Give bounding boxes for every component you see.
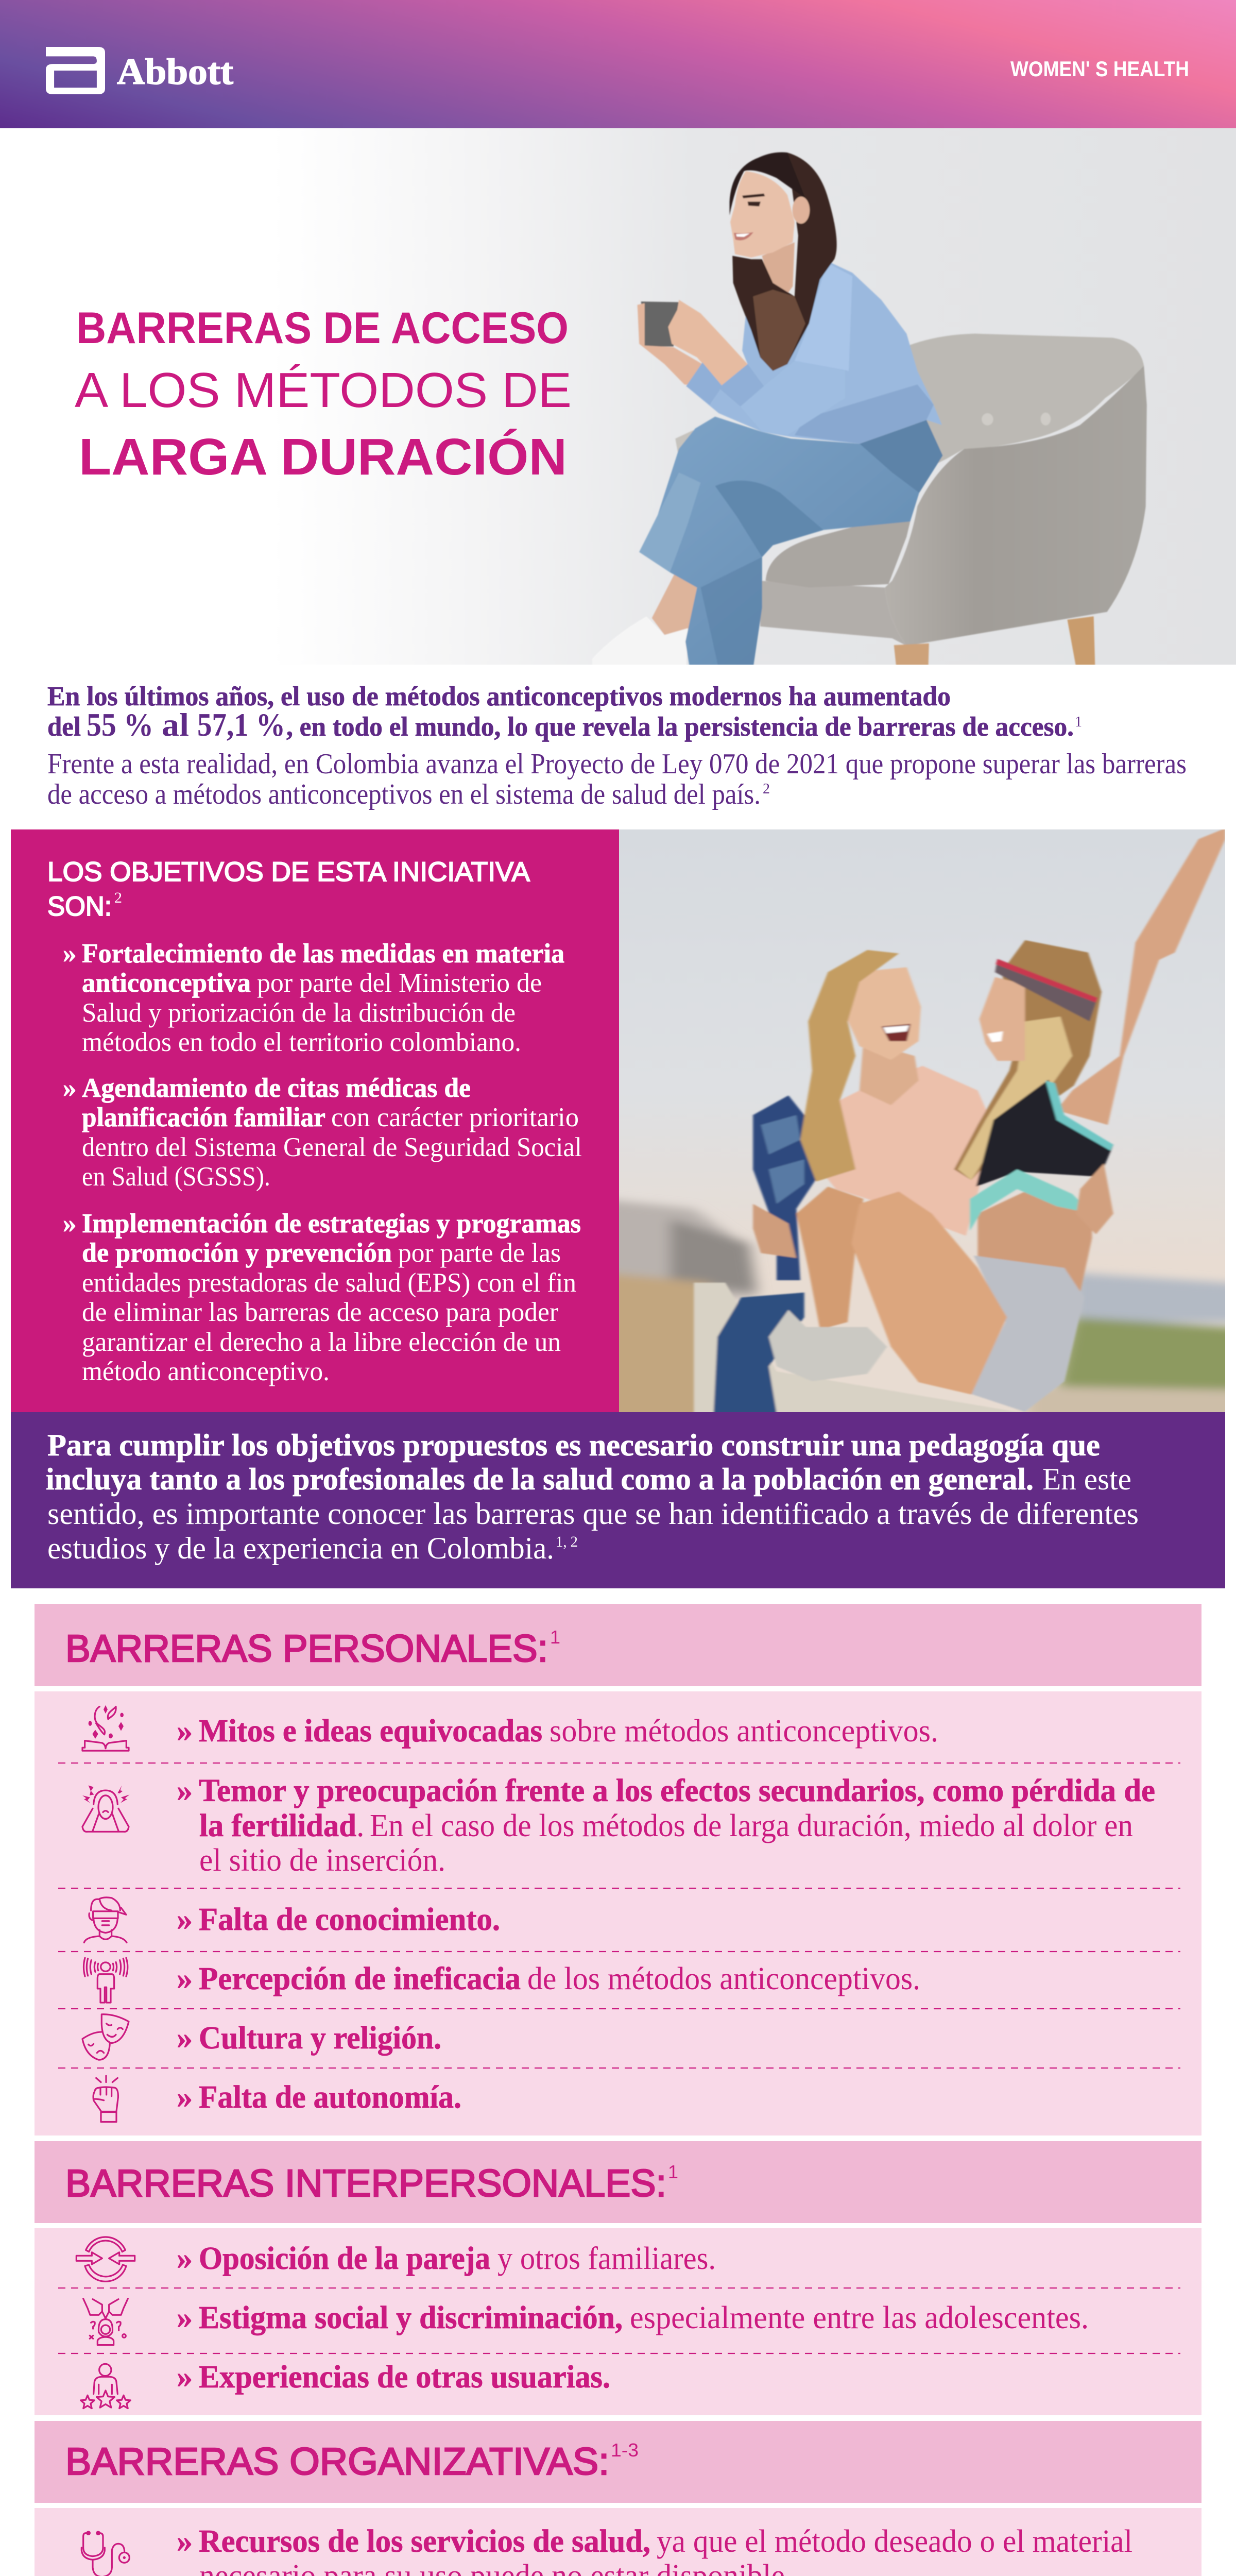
row: oposicion: Oposición de la pareja xyxy=(199,2241,490,2276)
left woman neck and face xyxy=(860,1041,919,1105)
ledge xyxy=(694,1283,1025,1413)
hair xyxy=(730,152,837,371)
legging lower xyxy=(714,1293,804,1413)
icon: worried woman xyxy=(82,1785,130,1832)
shorts xyxy=(970,1256,1084,1412)
panel: barreras interpersonales xyxy=(35,2141,1201,2415)
row: temor: . xyxy=(356,1808,365,1843)
objective 1: por parte del Ministerio de xyxy=(257,968,542,998)
intro text: al xyxy=(162,706,189,743)
intro text: 55 % xyxy=(87,706,153,743)
row: temor: el sitio de inserción. xyxy=(199,1843,445,1878)
title: BARRERAS DE ACCESO xyxy=(76,303,569,353)
legging upper xyxy=(753,1095,816,1280)
row: mitos: Mitos e ideas equivocadas xyxy=(199,1714,542,1749)
objective 1: » xyxy=(63,939,76,969)
icon: pointing hands at woman xyxy=(83,2299,128,2345)
intro text xyxy=(47,682,1187,810)
neck xyxy=(761,242,795,293)
row: oposicion xyxy=(177,2241,716,2276)
right woman face xyxy=(980,977,1025,1061)
objective 3: garantizar el derecho a la libre elección de un xyxy=(82,1327,561,1357)
panel: barreras organizativas xyxy=(35,2421,1201,2576)
row: temor: la fertilidad xyxy=(199,1808,356,1843)
intro text: , en todo el mundo, lo que revela la persistencia de barreras de acceso. xyxy=(286,712,1074,742)
row: estigma: » xyxy=(177,2300,193,2335)
panel: objectives xyxy=(11,829,619,1412)
background landscape xyxy=(552,1194,1236,1445)
objectives heading: LOS OBJETIVOS DE ESTA INICIATIVA xyxy=(47,857,530,887)
Abbott logo white xyxy=(46,47,233,94)
panel: pedagogy callout xyxy=(11,1412,1225,1588)
icon: raised fist xyxy=(93,2076,118,2122)
objective 2: dentro del Sistema General de Seguridad Social xyxy=(82,1132,582,1162)
belly xyxy=(977,1192,1092,1293)
icon: stethoscope xyxy=(81,2531,129,2576)
icon: opposing arrows xyxy=(76,2237,135,2281)
row: mitos xyxy=(177,1714,938,1749)
Abbott logo white: Abbott xyxy=(117,51,233,92)
hand on waist xyxy=(1076,1163,1113,1234)
header band xyxy=(0,0,1236,128)
section header: BARRERAS PERSONALES: xyxy=(65,1627,548,1670)
hero photo: woman in armchair xyxy=(421,128,1236,665)
row: recursos xyxy=(177,2524,1132,2576)
intro text: 2 xyxy=(763,781,770,797)
objective 2: en Salud (SGSSS). xyxy=(82,1162,270,1192)
intro text: 57,1 % xyxy=(197,706,285,743)
intro text: de acceso a métodos anticonceptivos en el sistema de salud del país. xyxy=(47,778,761,810)
row: ineficacia xyxy=(177,1961,920,1996)
section header xyxy=(35,2421,1201,2503)
section header: BARRERAS ORGANIZATIVAS: xyxy=(65,2440,609,2483)
objective 3: método anticonceptivo. xyxy=(82,1357,330,1386)
title xyxy=(75,303,572,486)
left woman arm xyxy=(753,1204,796,1258)
objective 3: Implementación de estrategias y programas xyxy=(82,1209,581,1239)
section header: 1-3 xyxy=(611,2439,639,2461)
panel: barreras personales xyxy=(35,1604,1201,2136)
objective 3: de promoción y prevención xyxy=(82,1238,392,1268)
panel: pedagogy callout: Para cumplir los objetivos propuestos es necesario construir una pedagogía que xyxy=(47,1428,1100,1462)
row: cultura: » xyxy=(177,2021,193,2056)
objective 2: con carácter prioritario xyxy=(331,1103,579,1132)
row: temor: En el caso de los métodos de larga duración, miedo al dolor en xyxy=(370,1808,1133,1843)
icon: magic book xyxy=(82,1705,129,1751)
row: ineficacia: » xyxy=(177,1961,193,1996)
objectives heading xyxy=(47,857,530,922)
jeans xyxy=(639,417,942,669)
icon: person with signal waves xyxy=(83,1958,128,2003)
header label: WOMEN' S HEALTH xyxy=(1010,57,1189,81)
row: recursos: » xyxy=(177,2524,193,2559)
headband xyxy=(995,959,1097,1022)
row: experiencias: » xyxy=(177,2360,193,2395)
row: estigma xyxy=(177,2300,1089,2335)
left woman top xyxy=(820,1066,995,1236)
panel: pedagogy callout: sentido, es importante conocer las barreras que se han identificado a través de diferentes xyxy=(47,1497,1139,1531)
intro text: En los últimos años, el uso de métodos anticonceptivos modernos ha aumentado xyxy=(47,682,951,711)
row: cultura: Cultura y religión. xyxy=(199,2021,441,2056)
panel: pedagogy callout: En este xyxy=(1042,1462,1131,1496)
icon: theatre masks xyxy=(82,2014,129,2060)
objective 3: por parte de las xyxy=(398,1238,561,1268)
objective 1: Salud y priorización de la distribución de xyxy=(82,998,516,1028)
row: ineficacia: Percepción de ineficacia xyxy=(199,1961,521,1996)
icon: person with stars xyxy=(81,2364,130,2409)
row: autonomia: » xyxy=(177,2080,193,2115)
row: conocimiento: » xyxy=(177,1902,193,1937)
objective 2 xyxy=(63,1073,582,1192)
back hand and forearm xyxy=(638,303,702,386)
sweater xyxy=(686,261,942,444)
section header xyxy=(35,2141,1201,2223)
front hand and forearm xyxy=(668,300,748,386)
shoe xyxy=(769,1310,887,1381)
objectives heading: 2 xyxy=(114,889,122,906)
objective 1: Fortalecimiento de las medidas en materia xyxy=(82,939,564,969)
row: temor: » xyxy=(177,1773,193,1808)
panel: pedagogy callout: incluya tanto a los profesionales de la salud como a la población en general. xyxy=(46,1462,1034,1496)
objective 2: planificación familiar xyxy=(82,1103,325,1132)
objective 1: anticonceptiva xyxy=(82,968,251,998)
row: recursos: Recursos de los servicios de salud, xyxy=(199,2524,650,2559)
sleeve over hair xyxy=(800,414,819,427)
row: experiencias: Experiencias de otras usuarias. xyxy=(199,2360,610,2395)
left woman hair xyxy=(800,950,899,1182)
mug xyxy=(641,301,679,347)
objective 2: Agendamiento de citas médicas de xyxy=(82,1073,471,1103)
photo: two women outdoors xyxy=(552,828,1236,1445)
section header: BARRERAS INTERPERSONALES: xyxy=(65,2162,666,2205)
objective 3: entidades prestadoras de salud (EPS) con el fin xyxy=(82,1268,576,1298)
section header xyxy=(35,1604,1201,1686)
objective 1: métodos en todo el territorio colombiano. xyxy=(82,1027,521,1057)
crop top xyxy=(976,1080,1113,1187)
title: A LOS MÉTODOS DE xyxy=(75,363,572,418)
section header: 1 xyxy=(668,2161,678,2182)
armchair xyxy=(675,334,1147,669)
legs xyxy=(796,1187,863,1330)
row: oposicion: » xyxy=(177,2241,193,2276)
row: estigma: especialmente entre las adolescentes. xyxy=(630,2300,1089,2335)
objective 3: de eliminar las barreras de acceso para poder xyxy=(82,1297,558,1327)
section header: 1 xyxy=(550,1626,560,1648)
objective 3 xyxy=(63,1209,581,1386)
row: mitos: sobre métodos anticonceptivos. xyxy=(550,1714,938,1749)
intro text: del xyxy=(47,712,81,742)
row: recursos: ya que el método deseado o el material xyxy=(657,2524,1132,2559)
row: mitos: » xyxy=(177,1714,193,1749)
row: temor xyxy=(177,1773,1155,1878)
intro text: 1 xyxy=(1075,714,1082,730)
objective 2: » xyxy=(63,1073,76,1103)
panel: pedagogy callout: estudios y de la experiencia en Colombia. xyxy=(47,1531,554,1565)
cuffs xyxy=(686,362,764,406)
raised arm xyxy=(1057,828,1225,1125)
objective 1 xyxy=(63,939,564,1057)
row: oposicion: y otros familiares. xyxy=(497,2241,716,2276)
title: LARGA DURACIÓN xyxy=(79,428,567,486)
face xyxy=(730,171,810,258)
row: autonomia: Falta de autonomía. xyxy=(199,2080,461,2115)
row: conocimiento: Falta de conocimiento. xyxy=(199,1902,500,1937)
mint band xyxy=(970,1170,1092,1231)
row: estigma: Estigma social y discriminación, xyxy=(199,2300,623,2335)
icon: blindfolded person xyxy=(84,1897,127,1943)
row: temor: Temor y preocupación frente a los efectos secundarios, como pérdida de xyxy=(199,1773,1155,1808)
objective 3: » xyxy=(63,1209,76,1239)
right woman hair xyxy=(954,940,1102,1180)
row: ineficacia: de los métodos anticonceptivos. xyxy=(527,1961,920,1996)
lower leg and shoe xyxy=(652,572,697,635)
objectives heading: SON: xyxy=(47,891,112,922)
panel: pedagogy callout: 1, 2 xyxy=(556,1533,578,1550)
